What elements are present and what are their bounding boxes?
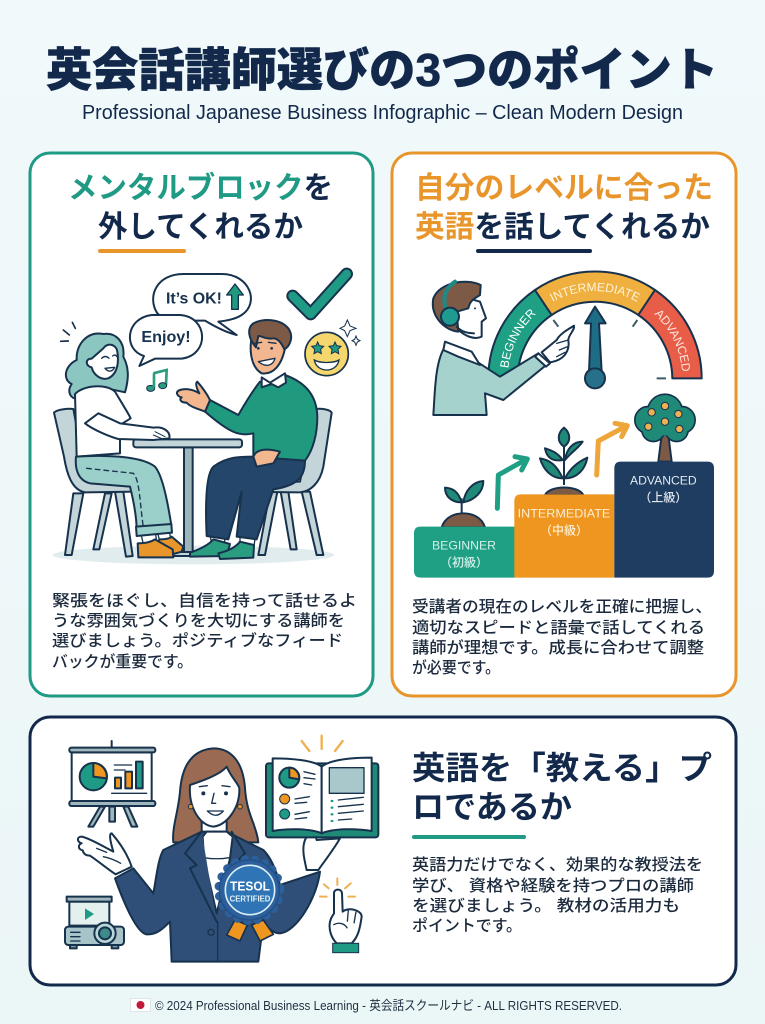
icon: Japanese flag	[130, 998, 150, 1012]
panel: level matching	[390, 152, 738, 698]
illustration: certified teacher with materials	[65, 736, 378, 962]
panel: mental block	[30, 153, 373, 696]
woman teacher	[78, 748, 340, 962]
step: beginner	[414, 481, 515, 578]
icon: projector	[65, 897, 124, 948]
gauge: ADVANCED	[654, 310, 690, 371]
body text: level matching: 受講者の現在のレベルを正確に把握し、	[412, 597, 712, 616]
speech bubble: Enjoy: Enjoy!	[141, 329, 191, 346]
heading: mental block: 外してくれるか	[98, 211, 303, 244]
body text: mental block: 緊張をほぐし、自信を持って話せるよ	[52, 592, 357, 610]
icon: pointing hand	[320, 878, 362, 953]
body text: level matching	[412, 597, 712, 677]
icon: check mark	[293, 274, 347, 314]
body text: mental block	[52, 592, 357, 671]
body text: mental block: うな雰囲気づくりを大切にする講師を	[52, 611, 345, 630]
icon: music notes	[147, 370, 167, 391]
panel: teaching professional	[30, 717, 736, 985]
heading: level matching	[415, 172, 713, 244]
step: intermediate	[514, 428, 614, 578]
heading: teaching professional: 英語を「教える」プ	[412, 750, 712, 786]
heading: level matching: 英語を話してくれるか	[415, 211, 710, 244]
step: intermediate: （中級）	[540, 522, 588, 537]
illustration: gauge and growth steps	[414, 270, 714, 578]
gauge: BEGINNER	[500, 310, 536, 368]
step: advanced	[614, 395, 714, 578]
body text: teaching professional	[412, 856, 703, 935]
icon: TESOL badge: CERTIFIED	[230, 895, 271, 904]
icon: table	[133, 439, 242, 556]
icon: open book	[266, 758, 378, 837]
step: beginner: BEGINNER	[432, 538, 496, 552]
heading: level matching: 自分のレベルに合った	[415, 172, 713, 205]
body text: teaching professional: 英語力だけでなく、効果的な教授法を	[412, 856, 703, 874]
body text: teaching professional: を選びましょう。 教材の活用力も	[412, 897, 680, 915]
icon: TESOL badge	[219, 859, 280, 941]
step: advanced: ADVANCED	[630, 474, 697, 488]
icon: presentation board	[69, 741, 155, 827]
icon: TESOL badge: TESOL	[230, 879, 270, 894]
subtitle: Professional Japanese Business Infographic – Clean Modern Design	[82, 102, 683, 124]
icon: star eyes emoji	[305, 320, 360, 376]
body text: teaching professional: 学び、 資格や経験を持つプロの講師	[412, 876, 694, 895]
body text: level matching: が必要です。	[412, 658, 500, 677]
body text: mental block: バックが重要です。	[52, 652, 193, 671]
illustration: conversation between student and teacher	[53, 274, 360, 564]
speech bubble: Enjoy	[130, 315, 202, 366]
heading: teaching professional: ロであるか	[412, 789, 572, 825]
heading: teaching professional	[412, 750, 712, 825]
heading: mental block	[68, 171, 333, 244]
speech bubble: It's OK: It’s OK!	[166, 290, 222, 307]
body text: teaching professional: ポイントです。	[412, 917, 522, 935]
arrow: orange step up	[597, 423, 627, 475]
icon: left chair	[54, 409, 133, 557]
body text: mental block: 選びましょう。ポジティブなフィード	[52, 631, 343, 650]
speech bubble: It's OK	[153, 274, 251, 335]
body text: level matching: 講師が理想です。成長に合わせて調整	[412, 638, 704, 657]
step: beginner: （初級）	[440, 554, 488, 569]
title: 英会話講師選びの3つのポイント	[46, 44, 718, 96]
gauge: INTERMEDIATE	[550, 282, 640, 302]
body text: level matching: 適切なスピードと語彙で話してくれる	[412, 619, 705, 637]
icon: right chair	[230, 409, 332, 555]
step: advanced: （上級）	[639, 491, 687, 505]
arrow: teal step up	[497, 457, 527, 508]
man with headset pointing	[433, 282, 574, 415]
footer: © 2024 Professional Business Learning - 英会話スクールナビ - ALL RIGHTS RESERVED.	[155, 998, 622, 1013]
heading: mental block: メンタルブロックを	[68, 171, 333, 205]
sparks over book	[302, 736, 343, 751]
gauge	[488, 270, 703, 390]
man teacher	[177, 320, 317, 559]
step: intermediate: INTERMEDIATE	[518, 507, 610, 521]
woman student	[66, 334, 183, 557]
